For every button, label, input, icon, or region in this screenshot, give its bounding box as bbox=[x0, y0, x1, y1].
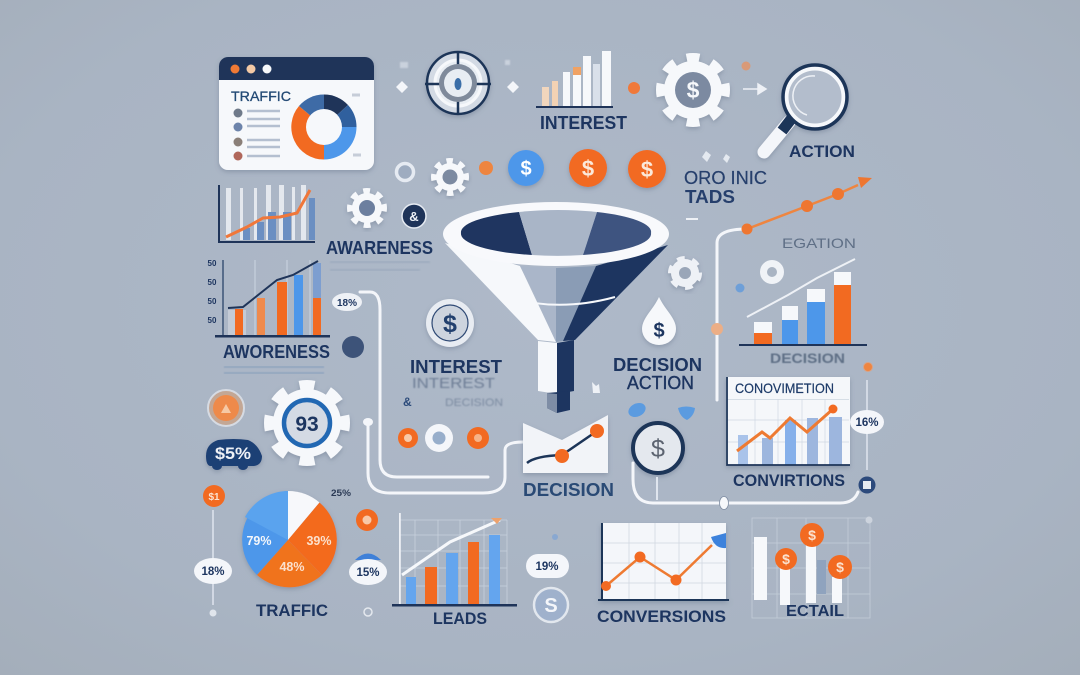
icon: S coin: S bbox=[544, 595, 558, 617]
badge: 5 dollar pill: $5% bbox=[215, 444, 251, 463]
heading: organic ads: ORO INIC bbox=[684, 168, 767, 188]
icon: large gear with dollar: $ bbox=[687, 77, 700, 103]
connector: vertical to growth line bbox=[717, 229, 747, 400]
icon: blue tag bbox=[736, 284, 744, 292]
heading: organic ads: TADS bbox=[685, 187, 735, 207]
decorative label rule bbox=[330, 262, 430, 270]
label: small percent: 25% bbox=[331, 488, 351, 498]
icon: white sparkle bbox=[592, 382, 600, 393]
decorative line bbox=[866, 380, 868, 470]
faded sub-label: DECISION bbox=[445, 397, 503, 409]
icon: decision chart envelope bbox=[523, 415, 608, 473]
icon: dollar ring: $ bbox=[651, 435, 665, 463]
heading: interest centre: INTEREST bbox=[410, 357, 502, 377]
chart: ectail bars bbox=[752, 516, 872, 618]
icon: gear left of funnel bbox=[350, 191, 384, 225]
chart: traffic pie: 39% bbox=[306, 534, 332, 548]
heading: interest top: INTEREST bbox=[540, 113, 627, 133]
coins on bars: $ bbox=[782, 551, 790, 567]
chart: awareness bars: 50 bbox=[208, 297, 217, 306]
icon: sparkle diamonds bbox=[396, 60, 519, 93]
badge: 18 percent left bbox=[194, 558, 232, 584]
chart: interest bars bbox=[536, 51, 613, 108]
connector: left outer line bbox=[360, 292, 488, 477]
icon: orange coin row bbox=[398, 424, 489, 452]
icon: connector oval node bbox=[720, 496, 728, 510]
icon: small gear right of funnel bbox=[670, 258, 700, 288]
icon: ring badge bbox=[396, 164, 414, 180]
badge: 18 percent left: 18% bbox=[201, 566, 225, 578]
icon: sparkles near organic label bbox=[702, 151, 730, 163]
decorative label rule bbox=[224, 367, 324, 373]
badge: 19 percent bbox=[526, 554, 569, 578]
icon: connector node bbox=[363, 418, 373, 426]
chart: orange growth line bbox=[742, 177, 872, 234]
icon: S coin bbox=[534, 588, 568, 622]
chart: traffic pie: 79% bbox=[246, 534, 272, 548]
arrow bbox=[743, 84, 766, 94]
icon: orange ring badge bbox=[208, 390, 244, 426]
icon: small navy badge bbox=[342, 336, 364, 358]
icon: dollar coin bbox=[426, 299, 474, 347]
icon: navy square node bbox=[858, 476, 876, 494]
badge: 15 percent: 15% bbox=[356, 567, 380, 579]
icon: blue tick bbox=[552, 534, 558, 540]
heading: organic ads bbox=[684, 168, 767, 207]
icon: orange dollar coin one: $ bbox=[582, 156, 594, 181]
badge: 16 percent bbox=[850, 410, 884, 434]
icon: blue blobs bbox=[626, 400, 695, 420]
funnel graphic bbox=[443, 202, 669, 413]
icon: orange dollar coin two: $ bbox=[641, 157, 653, 182]
heading: convirtions: CONVIRTIONS bbox=[733, 471, 845, 490]
heading: action top: ACTION bbox=[789, 142, 855, 161]
chart: leads bbox=[392, 513, 517, 606]
icon: dollar ring bbox=[633, 423, 683, 473]
connector: funnel to decision bbox=[368, 422, 523, 493]
badge: 18 percent: 18% bbox=[337, 298, 357, 309]
icon: navy coin: & bbox=[409, 209, 419, 224]
heading: leads: LEADS bbox=[433, 609, 487, 628]
funnel ring line bbox=[502, 296, 615, 305]
icon: target bbox=[425, 52, 491, 114]
badge: 18 percent bbox=[332, 293, 362, 311]
chart: traffic pie bbox=[242, 491, 337, 587]
icon: small orange coin bbox=[479, 161, 493, 175]
coins on bars: $ bbox=[808, 527, 816, 543]
heading: decision: DECISION bbox=[613, 355, 702, 375]
funnel rim bbox=[443, 202, 669, 266]
icon: orange connector marker bbox=[864, 362, 872, 372]
chart: awareness bars: 50 bbox=[208, 316, 217, 325]
badge: 5 dollar pill bbox=[206, 439, 262, 470]
icon: large gear with 93 bbox=[270, 386, 344, 460]
funnel body bbox=[445, 243, 668, 342]
label: education faded: EGATION bbox=[782, 235, 856, 251]
icon: large gear with 93: 93 bbox=[295, 413, 319, 436]
faded interest label: INTEREST bbox=[412, 375, 495, 392]
icon: connector node bbox=[711, 323, 723, 335]
badge: 16 percent: 16% bbox=[855, 417, 879, 429]
icon: droplet with dollar: $ bbox=[653, 320, 665, 342]
icon: dollar coin: $ bbox=[443, 310, 457, 338]
panel: traffic browser window bbox=[219, 57, 374, 170]
conversion panel title: CONOVIMETION bbox=[735, 380, 834, 396]
icon: magnifying glass bbox=[764, 65, 847, 152]
chart: right bars bbox=[739, 259, 867, 346]
label: faded decision: DECISION bbox=[770, 350, 845, 366]
icon: orange dot bbox=[628, 82, 640, 94]
chart: conversion panel bbox=[726, 377, 850, 465]
heading: awareness: AWARENESS bbox=[326, 238, 433, 258]
icon: droplet with dollar bbox=[642, 297, 676, 345]
decorative label rule bbox=[548, 135, 624, 137]
traffic window title: TRAFFIC bbox=[231, 88, 291, 104]
icon: blue dollar coin bbox=[508, 150, 544, 186]
heading: ectail: ECTAIL bbox=[786, 603, 844, 620]
icon: small ring bbox=[364, 608, 372, 616]
chart: conversions bbox=[598, 523, 729, 600]
ampersand label: & bbox=[403, 395, 412, 409]
icon: gear left of coins bbox=[434, 161, 466, 193]
chart: awareness bars bbox=[208, 259, 330, 338]
connector: lower right line bbox=[633, 463, 858, 503]
icon: ring gear bbox=[764, 264, 780, 280]
icon: blue dollar coin: $ bbox=[520, 158, 532, 180]
coins on bars bbox=[775, 523, 852, 579]
traffic donut chart bbox=[291, 94, 357, 160]
chart: traffic line and bars bbox=[219, 185, 315, 242]
badge: 19 percent: 19% bbox=[535, 561, 559, 573]
heading: action: ACTION bbox=[627, 373, 694, 393]
heading: aworeness: AWORENESS bbox=[223, 342, 330, 362]
heading: decision lower: DECISION bbox=[523, 480, 614, 500]
icon: orange dollar coin one bbox=[569, 149, 607, 187]
funnel spout bbox=[538, 340, 574, 413]
chart: awareness bars: 50 bbox=[208, 278, 217, 287]
heading: traffic: TRAFFIC bbox=[256, 601, 328, 620]
icon: navy coin bbox=[402, 204, 426, 228]
line with markers: left timeline: $1 bbox=[208, 492, 220, 503]
icon: orange coin bbox=[356, 509, 378, 531]
icon: large gear with dollar bbox=[661, 58, 725, 122]
icon: small orange marker bbox=[742, 62, 750, 70]
badge: 15 percent bbox=[349, 554, 387, 585]
coins on bars: $ bbox=[836, 559, 844, 575]
line with markers: left timeline bbox=[203, 485, 225, 616]
traffic window legend list bbox=[234, 108, 280, 160]
chart: traffic pie: 48% bbox=[279, 560, 305, 574]
icon: orange dollar coin two bbox=[628, 150, 666, 188]
chart: awareness bars: 50 bbox=[208, 259, 217, 268]
heading: conversions: CONVERSIONS bbox=[597, 607, 726, 626]
